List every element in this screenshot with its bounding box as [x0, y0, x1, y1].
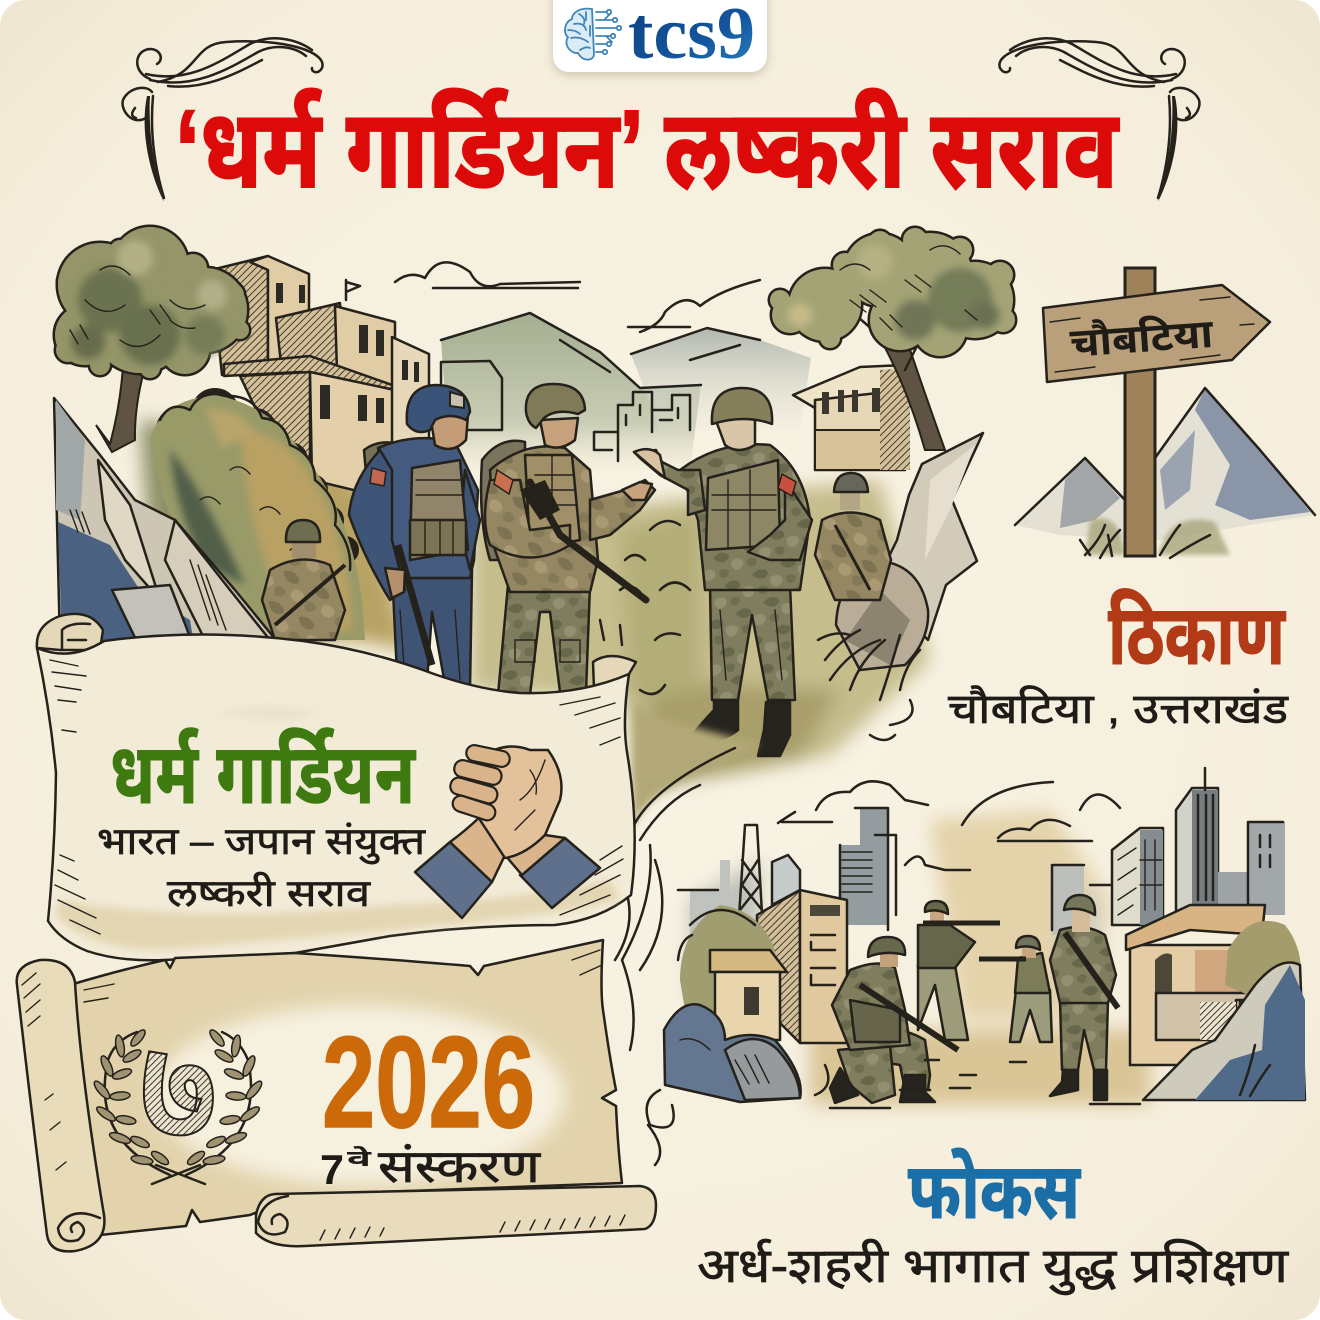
bottom roll spiral	[258, 1196, 288, 1234]
icon: circuit brain	[565, 9, 621, 60]
logo: tcs9	[553, 0, 767, 75]
rocks left	[54, 398, 280, 660]
clouds	[778, 781, 1120, 870]
bottom roll hatch	[320, 1215, 625, 1240]
soldier: camouflage centre	[481, 384, 655, 695]
roll spiral	[58, 1213, 100, 1241]
mountains	[441, 313, 811, 470]
rocks left	[664, 1004, 801, 1102]
washes	[690, 810, 1150, 1105]
post	[1125, 268, 1155, 556]
soldier: aiming left	[979, 936, 1052, 1042]
clouds	[395, 262, 760, 332]
ornament: right flourish	[999, 38, 1199, 202]
right building	[1126, 905, 1301, 1065]
wreath	[92, 1028, 264, 1184]
location text: चौबटिया , उत्तराखंड	[948, 685, 1289, 732]
scroll subtitle line 1: भारत – जपान संयुक्त	[97, 821, 426, 864]
edition superscript: वे	[347, 1146, 372, 1171]
edition number: 7	[320, 1146, 344, 1193]
right tree	[770, 228, 1015, 450]
year: 2026	[322, 1009, 535, 1155]
small soldier right	[815, 473, 891, 600]
left roll	[17, 960, 104, 1251]
scroll: 2026 edition	[17, 940, 656, 1251]
soldier: kneeling	[830, 937, 958, 1103]
board grain	[1050, 297, 1254, 372]
illustration: urban combat training	[664, 768, 1305, 1108]
bottom roll	[256, 1186, 656, 1246]
ornament: left flourish	[123, 38, 323, 202]
town	[594, 392, 690, 461]
focus text: अर्ध-शहरी भागात युद्ध प्रशिक्षण	[697, 1238, 1289, 1296]
signpost	[1015, 268, 1315, 558]
parchment light centre	[155, 1005, 565, 1185]
curly flourish between panels	[615, 700, 760, 1165]
right house	[793, 365, 910, 470]
rocks right	[1143, 962, 1305, 1100]
buildings left	[211, 256, 502, 500]
foreground grass	[600, 521, 912, 740]
icon: clasped hands	[415, 744, 600, 918]
arrow board	[1043, 285, 1270, 382]
soldier: blue uniform	[349, 385, 480, 695]
left tree	[55, 227, 249, 452]
title: ‘धर्म गार्डियन’ लष्करी सराव	[175, 88, 1119, 211]
bushes left	[150, 390, 365, 640]
skyline	[678, 768, 1285, 960]
scroll heading: धर्म गार्डियन	[110, 727, 416, 821]
edition word: संस्करण	[378, 1140, 541, 1192]
soldier: standing guard	[1050, 895, 1118, 1100]
numeral seven: ७	[139, 1011, 217, 1168]
roll hatch	[22, 950, 602, 1170]
scroll hatch	[50, 660, 623, 934]
scroll stain	[55, 707, 620, 950]
illustration: joint patrol scene	[54, 227, 1015, 790]
tan building	[757, 890, 847, 1043]
soldier: aiming rifle	[918, 901, 1000, 1040]
small soldier left	[262, 520, 345, 640]
soldier: camouflage right	[634, 388, 812, 756]
sign text: चौबटिया	[1068, 311, 1216, 366]
watercolor washes	[140, 420, 930, 790]
rocks right	[818, 433, 983, 700]
focus heading: फोकस	[908, 1147, 1081, 1235]
hut and bush	[678, 905, 787, 1040]
fingers	[448, 744, 511, 822]
mountains behind sign	[1015, 388, 1315, 558]
scroll subtitle line 2: लष्करी सराव	[167, 871, 371, 915]
scroll: धर्म गार्डियन	[37, 614, 636, 960]
